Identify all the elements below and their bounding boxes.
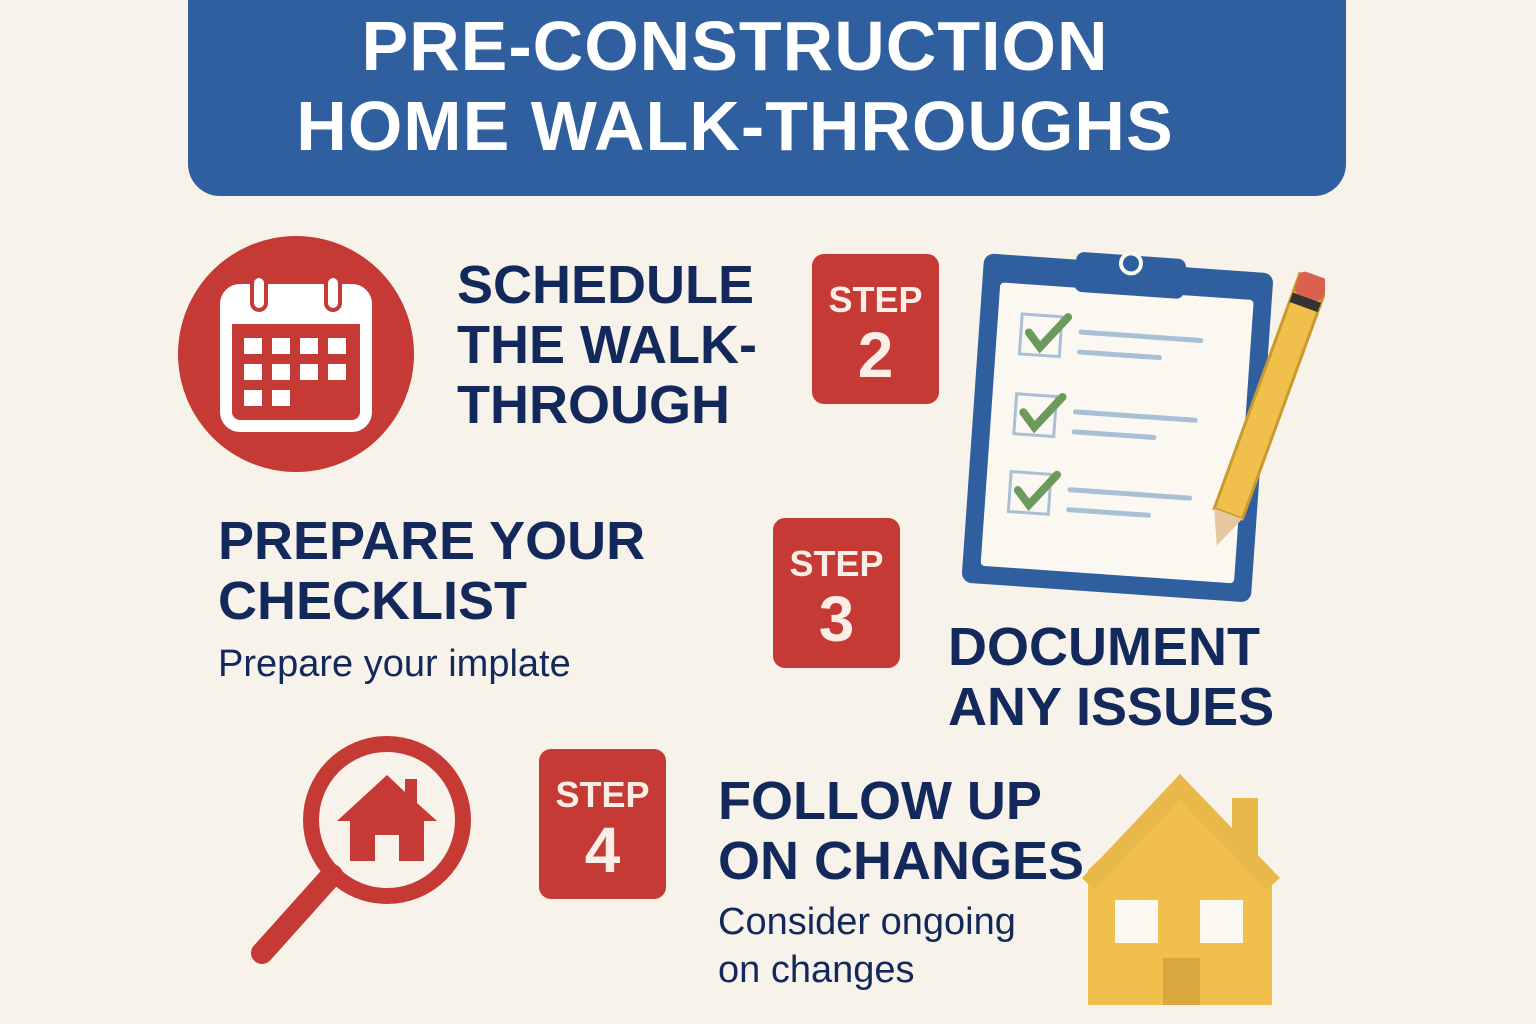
heading: document issues: DOCUMENT bbox=[948, 617, 1260, 677]
heading: follow up bbox=[718, 771, 1084, 891]
step 2 badge: 2 bbox=[858, 319, 893, 391]
step 3 badge bbox=[773, 518, 900, 668]
title banner: HOME WALK-THROUGHS bbox=[296, 87, 1174, 165]
step 4 badge bbox=[539, 749, 666, 899]
heading: follow up: FOLLOW UP bbox=[718, 771, 1042, 831]
heading: schedule: THROUGH bbox=[457, 375, 730, 435]
icon: clipboard and pencil bbox=[962, 252, 1325, 602]
heading: document issues: ANY ISSUES bbox=[948, 677, 1274, 737]
step 3 badge: 3 bbox=[819, 583, 854, 655]
step 2 badge: STEP bbox=[828, 279, 923, 320]
icon: magnifier house bbox=[251, 736, 471, 964]
text: prepare template: Prepare your implate bbox=[218, 643, 571, 685]
heading: schedule bbox=[457, 255, 757, 435]
text: consider ongoing: on changes bbox=[718, 949, 914, 991]
heading: prepare checklist bbox=[218, 511, 645, 631]
heading: follow up: ON CHANGES bbox=[718, 831, 1084, 891]
heading: prepare checklist: PREPARE YOUR bbox=[218, 511, 645, 571]
heading: prepare checklist: CHECKLIST bbox=[218, 571, 527, 631]
step 2 badge bbox=[812, 254, 939, 404]
heading: schedule: SCHEDULE bbox=[457, 255, 754, 315]
step 4 badge: STEP bbox=[555, 774, 650, 815]
heading: schedule: THE WALK- bbox=[457, 315, 757, 375]
icon: calendar bbox=[178, 236, 414, 472]
text: consider ongoing bbox=[718, 901, 1016, 991]
title banner: PRE-CONSTRUCTION bbox=[361, 7, 1109, 85]
title banner bbox=[188, 0, 1346, 196]
text: consider ongoing: Consider ongoing bbox=[718, 901, 1016, 943]
icon: yellow house bbox=[1082, 774, 1280, 1005]
step 4 badge: 4 bbox=[585, 814, 620, 886]
heading: document issues bbox=[948, 617, 1274, 737]
step 3 badge: STEP bbox=[789, 543, 884, 584]
